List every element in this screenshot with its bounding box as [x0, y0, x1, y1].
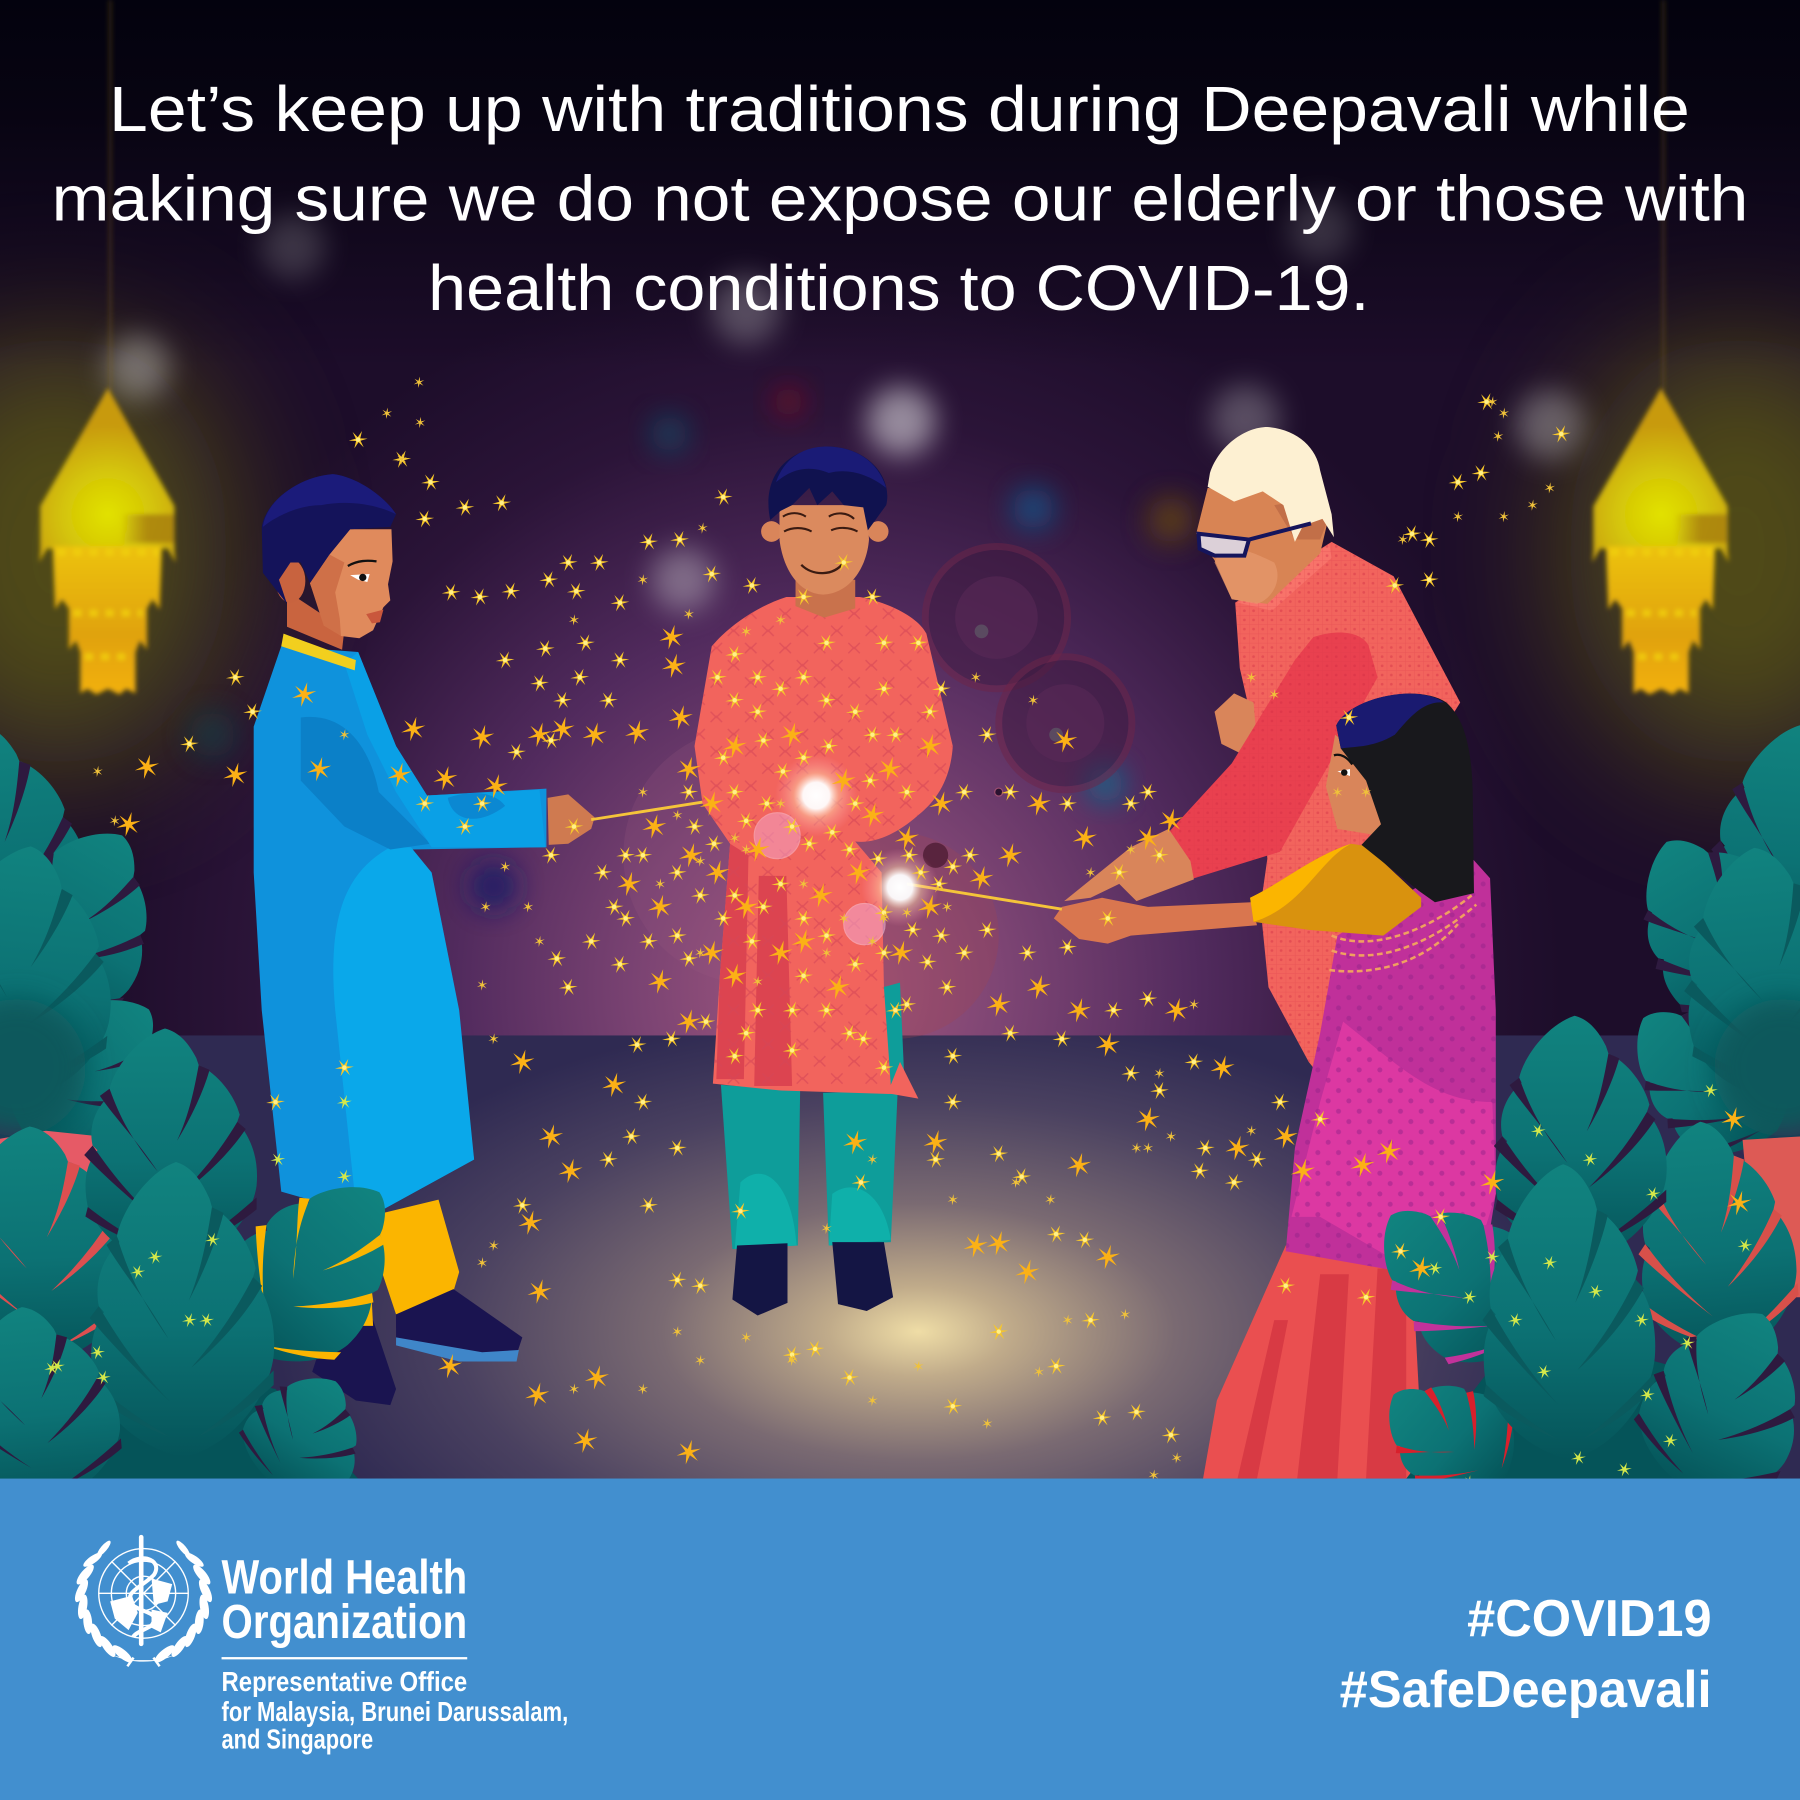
arm: [1169, 632, 1378, 879]
sparkler: right stick: [907, 884, 1062, 909]
WHO wordmark: [222, 1550, 568, 1754]
coral leaf: [0, 1123, 139, 1367]
kurta: [695, 597, 953, 1099]
collar: [281, 634, 356, 670]
icon: WHO emblem: [72, 1537, 215, 1666]
WHO wordmark: Representative Office: [222, 1666, 467, 1697]
hand and sparkler: [548, 790, 781, 845]
headline: [52, 73, 1748, 324]
hashtags: #SafeDeepavali: [1340, 1660, 1712, 1718]
hashtags: #COVID19: [1467, 1589, 1712, 1647]
kurta: [254, 646, 546, 1217]
WHO wordmark: World Health: [222, 1550, 467, 1604]
skirt: [1203, 1246, 1423, 1479]
sari: [1286, 855, 1496, 1286]
lantern: right: [1592, 0, 1729, 695]
figure: girl in pink sari: [1054, 694, 1496, 1479]
face: [1326, 735, 1395, 836]
near trouser and shoe: [367, 1200, 522, 1361]
blouse: [1250, 844, 1421, 936]
far trouser and shoe: [293, 1217, 396, 1405]
figure: boy in blue kurta: [254, 474, 781, 1405]
trousers: [721, 1085, 898, 1249]
headline: health conditions to COVID-19.: [428, 252, 1370, 324]
bush base: [0, 1355, 358, 1479]
plants: left group: [0, 718, 438, 1517]
head: [761, 447, 889, 618]
hair: [262, 474, 396, 604]
back leaves: [0, 718, 199, 1182]
headline: Let’s keep up with traditions during Deepavali while: [109, 73, 1690, 145]
WHO wordmark: for Malaysia, Brunei Darussalam,: [222, 1696, 568, 1727]
globe: [99, 1549, 188, 1638]
sparks: dense cluster around the sparklers: [614, 643, 970, 1056]
necklace: [1329, 895, 1476, 971]
head: [1196, 427, 1334, 604]
figure: centre boy in coral kurta: [695, 447, 953, 1316]
front leaves: [0, 1028, 438, 1517]
sparkler lights: [754, 754, 939, 945]
WHO wordmark: Organization: [222, 1595, 467, 1649]
figure: grandfather: [1064, 427, 1460, 1091]
bush base: [1406, 1355, 1777, 1479]
hashtags: [1340, 1589, 1712, 1718]
eye: [1334, 755, 1352, 776]
WHO wordmark: and Singapore: [222, 1723, 373, 1754]
sparks: green-tinted stars over leaves: [52, 1091, 1745, 1469]
sparks: small distant stars: [98, 382, 1550, 1481]
shoes: [732, 1242, 893, 1316]
glasses: [1198, 523, 1311, 556]
coral leaf: [1627, 1115, 1800, 1367]
fist: [1215, 693, 1257, 753]
neck, face and ear: [276, 529, 393, 650]
plants: right group: [1345, 717, 1800, 1526]
facial features: [348, 561, 383, 623]
wreath: [72, 1539, 215, 1666]
headline: making sure we do not expose our elderly or those with: [52, 162, 1748, 234]
lens flare rings: [623, 546, 1132, 1039]
hand: [1064, 829, 1194, 901]
background: floor with light pool: [0, 1035, 1800, 1479]
sparks: large orange stars: [129, 637, 1739, 1452]
back leaves: [1599, 717, 1800, 1184]
body: [1235, 542, 1460, 1091]
front leaves: [1345, 1016, 1800, 1526]
lantern: left: [39, 0, 176, 695]
bokeh lights: [106, 197, 1584, 909]
staff and serpent: [129, 1537, 156, 1644]
footer band: [0, 1479, 1800, 1800]
sparks: medium yellow stars: [189, 402, 1561, 1435]
teal inner panel: [883, 983, 905, 1085]
arm and hand: [1054, 898, 1257, 944]
hair: [1336, 694, 1474, 902]
